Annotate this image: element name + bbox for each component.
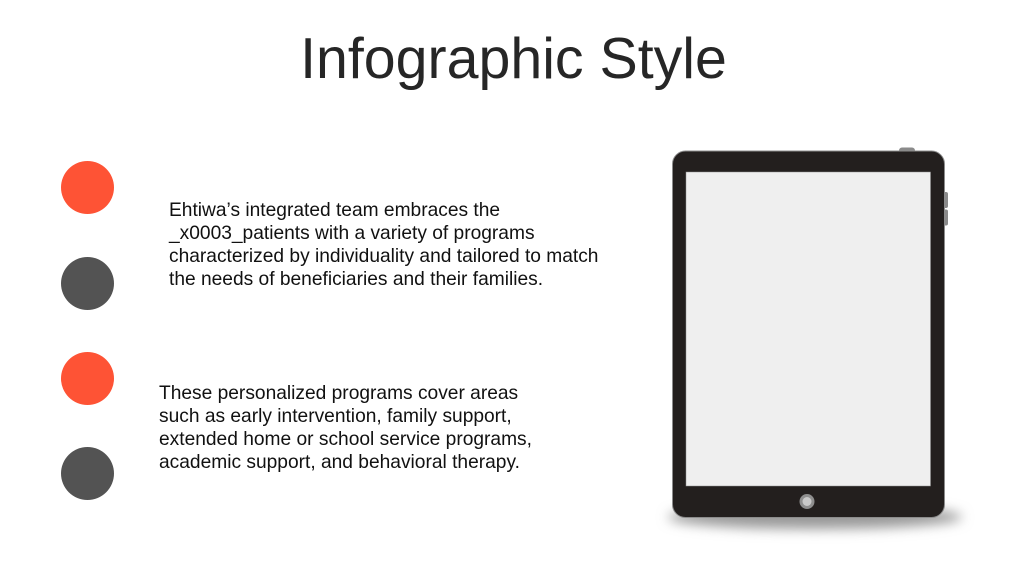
icon: tablet bbox=[664, 148, 966, 537]
text block: integrated team bbox=[168, 200, 598, 290]
icon: red circle 2 bbox=[61, 352, 114, 405]
icon: red circle 1 bbox=[61, 161, 114, 214]
text block: integrated team: the needs of beneficiaries and their families. bbox=[169, 268, 543, 290]
tablet top button bbox=[899, 148, 915, 156]
icon: gray circle 2 bbox=[61, 447, 114, 500]
tablet body bbox=[672, 151, 944, 518]
icon: gray circle 1 bbox=[61, 257, 114, 310]
text block: integrated team: characterized by individuality and tailored to match bbox=[169, 246, 598, 266]
tablet home button bbox=[800, 494, 814, 509]
title: Infographic Style bbox=[300, 26, 727, 90]
text block: personalized programs: These personalized programs cover areas bbox=[159, 382, 518, 404]
tablet volume buttons bbox=[941, 192, 948, 226]
tablet shadow bbox=[668, 505, 962, 529]
tablet screen bbox=[686, 172, 930, 486]
text block: integrated team: _x0003_patients with a variety of programs bbox=[169, 222, 535, 244]
text block: integrated team: Ehtiwa’s integrated team embraces the bbox=[169, 200, 500, 220]
text block: personalized programs: such as early intervention, family support, bbox=[159, 406, 512, 426]
text block: personalized programs: academic support, and behavioral therapy. bbox=[159, 452, 520, 472]
text block: personalized programs bbox=[159, 382, 532, 472]
text block: personalized programs: extended home or school service programs, bbox=[159, 428, 532, 450]
